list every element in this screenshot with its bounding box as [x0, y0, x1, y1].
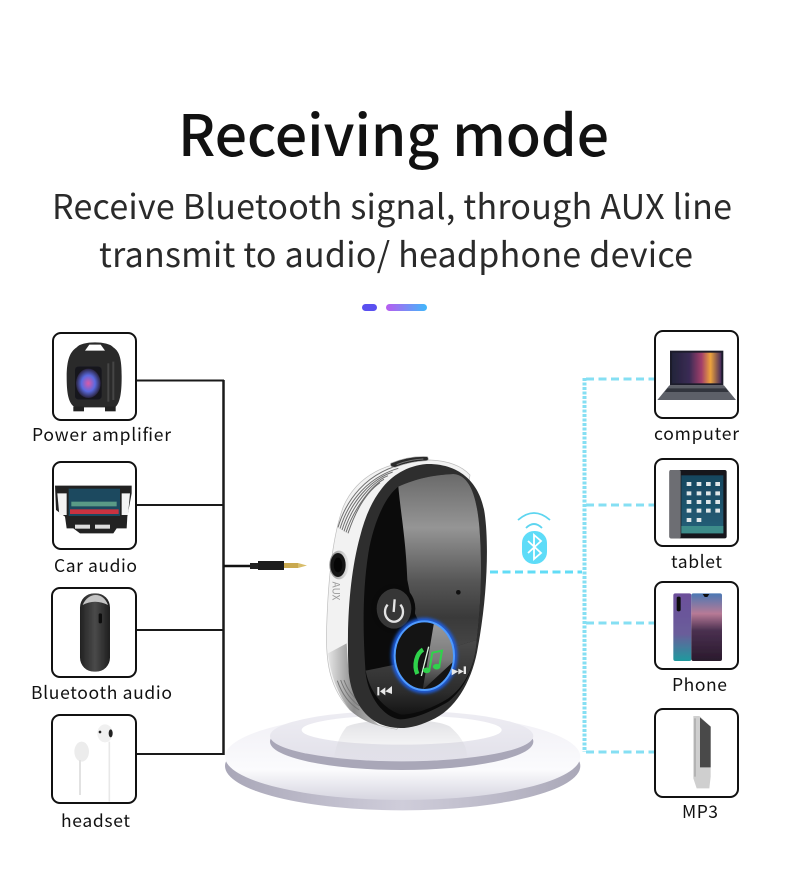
device front rim: [348, 464, 487, 728]
device: bluetooth receiver: [326, 457, 487, 729]
device glass: [364, 474, 481, 719]
subtitle: transmit to audio/ headphone device: [99, 228, 693, 277]
car head unit icon: [55, 486, 132, 533]
device mic hole: [456, 590, 461, 595]
label: MP3: [682, 799, 718, 824]
device box: tablet: [655, 459, 738, 574]
blue ring multifunction button: [394, 620, 455, 691]
label: computer: [654, 421, 739, 446]
label: Power amplifier: [32, 422, 171, 447]
device box: power amplifier: [32, 333, 171, 447]
phone and music glyph: [416, 647, 442, 676]
mp3 player icon: [693, 716, 711, 788]
label: tablet: [671, 549, 722, 574]
label: Bluetooth audio: [31, 680, 172, 705]
device silver body: [326, 460, 470, 729]
accent bars: [362, 304, 427, 311]
subtitle: Receive Bluetooth signal, through AUX line: [52, 180, 732, 229]
label: Phone: [672, 672, 727, 697]
device top vent ribs: [338, 466, 398, 533]
laptop icon: [657, 351, 736, 400]
label: Car audio: [54, 553, 137, 578]
device USB port: [391, 457, 428, 467]
device brushed control band: [366, 640, 477, 715]
device box: bluetooth audio: [31, 588, 172, 705]
device gloss panel: [398, 474, 481, 653]
device bottom vent ribs: [337, 680, 359, 710]
device lower side shading: [328, 643, 380, 726]
title: Receiving mode: [178, 91, 609, 173]
AUX label: AUX: [330, 582, 345, 601]
power button: [371, 584, 415, 633]
device box: MP3: [655, 709, 738, 824]
earphones icon: [74, 724, 113, 802]
pill speaker icon: [80, 593, 110, 672]
device box: computer: [654, 331, 739, 446]
device box: headset: [52, 715, 136, 833]
label: headset: [61, 808, 130, 833]
subtitle: [52, 180, 732, 277]
AUX jack: [329, 551, 349, 579]
phone icon: [673, 593, 722, 661]
device box: car audio: [53, 462, 137, 578]
speaker icon: [67, 342, 122, 411]
tablet icon: [669, 470, 727, 538]
right bluetooth dashed connector lines: [490, 378, 655, 752]
aux cable and plug: [224, 561, 307, 570]
platform: [225, 711, 580, 810]
device box: phone: [655, 582, 738, 697]
left wired connector lines: [136, 380, 224, 755]
next track icon: [452, 666, 466, 675]
previous track icon: [377, 686, 392, 695]
bluetooth icon: [518, 513, 550, 564]
